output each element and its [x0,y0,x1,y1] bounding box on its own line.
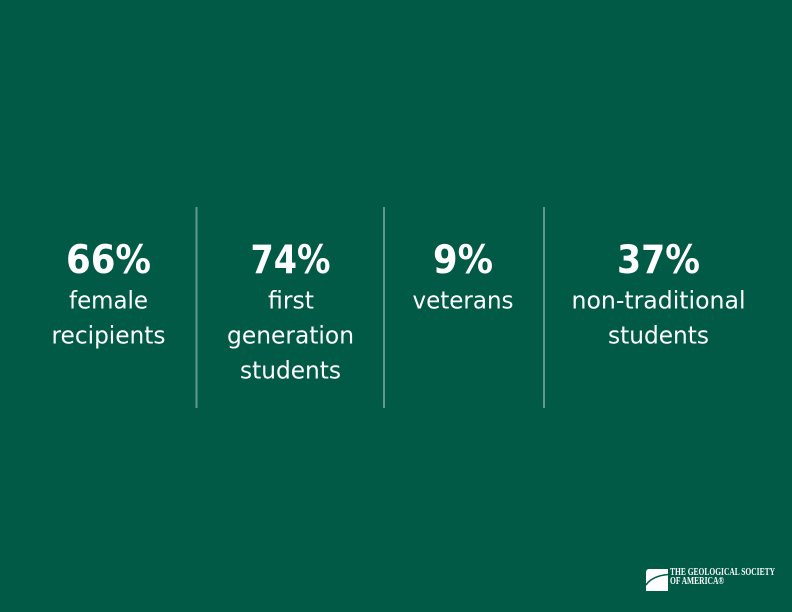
stat: 9% veterans: 9% [433,238,493,283]
stat: 66% female recipients: female [69,286,148,314]
stat: 74% first generation students [227,238,354,384]
stat: 37% non-traditional students: 37% [617,238,700,283]
stat: 9% veterans: veterans [412,286,514,314]
icon: logo mark [646,569,668,591]
logo: The Geological Society of America: OF AMERICA® [670,576,724,587]
stat: 66% female recipients: 66% [66,238,151,283]
stat: 74% first generation students: first [268,286,314,314]
stat: 66% female recipients: recipients [52,322,166,350]
stat: 66% female recipients [52,238,166,350]
stat: 74% first generation students: 74% [250,238,330,283]
stat: 37% non-traditional students: non-traditional [572,286,746,314]
stat: 74% first generation students: generation [227,322,354,350]
stat: 37% non-traditional students: students [608,322,709,350]
logo: The Geological Society of America [646,567,776,591]
stat: 9% veterans [412,238,514,314]
stat: 74% first generation students: students [240,356,341,384]
stat: 37% non-traditional students [572,238,746,350]
